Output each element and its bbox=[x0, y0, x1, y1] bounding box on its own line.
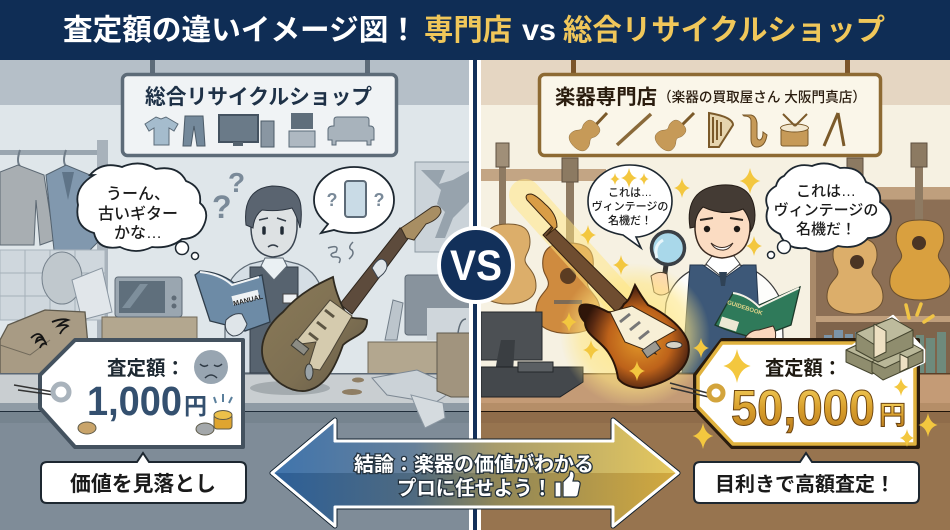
small speech text: 名機だ！ bbox=[608, 213, 652, 227]
question marks: ? bbox=[212, 189, 232, 225]
vs badge bbox=[439, 228, 513, 302]
icon: sofa bbox=[328, 117, 374, 145]
counter bbox=[0, 373, 473, 423]
swirl marks bbox=[31, 319, 68, 348]
conclusion text bbox=[354, 452, 594, 500]
speech bubble: phone: ? bbox=[374, 190, 384, 210]
small speech text: これは… bbox=[608, 186, 652, 199]
title: 総合リサイクルショップ bbox=[563, 14, 885, 47]
book: manual bbox=[195, 271, 270, 336]
shine lines on money bbox=[906, 304, 933, 322]
small speech text bbox=[592, 186, 668, 227]
icon: stack of money bbox=[843, 316, 924, 381]
thought text: かな… bbox=[114, 224, 162, 242]
thought text: これは… bbox=[796, 183, 856, 200]
wall guitar 2 bbox=[536, 158, 600, 333]
question marks: ? bbox=[228, 167, 245, 198]
title: 査定額の違いイメージ図！ bbox=[63, 14, 418, 47]
amount: 円 bbox=[879, 400, 906, 430]
thought text bbox=[774, 183, 878, 238]
sparkles bbox=[561, 168, 762, 381]
sign heading: （楽器の買取屋さん 大阪門真店） bbox=[658, 89, 866, 105]
thought text: 名機だ！ bbox=[796, 221, 856, 238]
pile of clothes in cardboard box bbox=[0, 310, 88, 375]
icon: sad face bbox=[194, 350, 228, 384]
sign heading: 楽器専門店 bbox=[555, 85, 657, 109]
man left: puzzled clerk bbox=[225, 186, 353, 373]
sign heading bbox=[555, 85, 866, 109]
amount: 1,000 bbox=[87, 378, 182, 424]
icon: tv and stand bbox=[289, 113, 315, 147]
vintage guitar bbox=[526, 194, 689, 388]
pegboard with goods bbox=[0, 250, 112, 320]
price tag left bbox=[14, 340, 243, 447]
conclusion text: 結論：楽器の価値がわかる bbox=[354, 452, 594, 476]
sign: general recycle shop bbox=[122, 60, 396, 156]
small speech text: ヴィンテージの bbox=[592, 199, 668, 213]
question marks bbox=[212, 167, 245, 225]
amp and shelf items bbox=[368, 275, 471, 375]
tag string bbox=[14, 385, 54, 395]
man right: expert clerk bbox=[660, 185, 784, 373]
tag hole bbox=[709, 386, 723, 400]
microwave on box bbox=[102, 277, 197, 375]
center divider bbox=[469, 60, 481, 530]
wall rail bbox=[481, 169, 606, 181]
book: manual: MANUAL bbox=[233, 294, 264, 308]
thought cloud left bbox=[77, 163, 206, 260]
green guidebook bbox=[715, 287, 800, 340]
thought text: 古いギター bbox=[98, 205, 178, 223]
conclusion text: プロに任せよう！ bbox=[397, 477, 552, 500]
icon: jeans bbox=[183, 116, 205, 146]
sparkles on tag bbox=[693, 349, 938, 449]
thought cloud right bbox=[766, 163, 891, 258]
paper bag and cloth bbox=[372, 319, 471, 428]
price tag right bbox=[670, 340, 938, 449]
speech bubble small bbox=[588, 165, 672, 248]
callout left bbox=[41, 453, 246, 503]
tag string bbox=[670, 383, 715, 398]
coins bbox=[78, 410, 232, 435]
title: 専門店 bbox=[424, 14, 512, 47]
counter bbox=[477, 373, 950, 423]
title: vs bbox=[522, 14, 556, 47]
amount: 50,000 bbox=[731, 380, 875, 436]
wall guitar 1 bbox=[480, 143, 536, 304]
label: 査定額： bbox=[107, 357, 185, 380]
thought text bbox=[98, 186, 178, 242]
amount: 円 bbox=[184, 393, 207, 419]
speech bubble: phone bbox=[314, 167, 394, 233]
panel: instrument specialty shop background bbox=[477, 60, 950, 530]
callout left: 価値を見落とし bbox=[70, 473, 216, 496]
wall map bbox=[415, 162, 471, 252]
tag hole bbox=[53, 384, 69, 400]
callout right bbox=[694, 453, 919, 503]
thought text: ヴィンテージの bbox=[774, 201, 878, 219]
head bbox=[251, 187, 297, 257]
green guidebook: GUIDEBOOK bbox=[726, 300, 764, 317]
title bbox=[63, 14, 885, 47]
swirl marks bbox=[328, 242, 353, 263]
magnifying glass bbox=[651, 232, 684, 295]
speech bubble: phone: ? bbox=[326, 190, 338, 210]
sign heading: 総合リサイクルショップ bbox=[145, 86, 372, 109]
wall guitar 3 bbox=[827, 158, 883, 314]
vs badge: VS bbox=[450, 242, 502, 290]
guitar glow bbox=[525, 195, 710, 407]
old guitar bbox=[262, 206, 441, 391]
cash register bbox=[481, 312, 583, 397]
head bbox=[695, 188, 750, 258]
icon: thumbs up bbox=[555, 471, 580, 497]
label: 査定額： bbox=[765, 357, 842, 380]
icons: instruments row bbox=[566, 113, 844, 154]
wooden wall and shelf bbox=[810, 187, 950, 374]
icon: monitor and tower bbox=[219, 115, 274, 147]
sign: instrument specialty shop bbox=[540, 60, 880, 156]
clothes rack bbox=[0, 140, 108, 375]
callout right: 目利きで高額査定！ bbox=[715, 473, 895, 496]
thought text: うーん、 bbox=[106, 186, 170, 203]
header bar bbox=[0, 0, 950, 60]
panel: general recycle shop background bbox=[0, 60, 473, 530]
icon: t-shirt bbox=[145, 117, 178, 145]
wall guitar 4 bbox=[890, 143, 950, 300]
double arrow conclusion bbox=[272, 420, 678, 526]
